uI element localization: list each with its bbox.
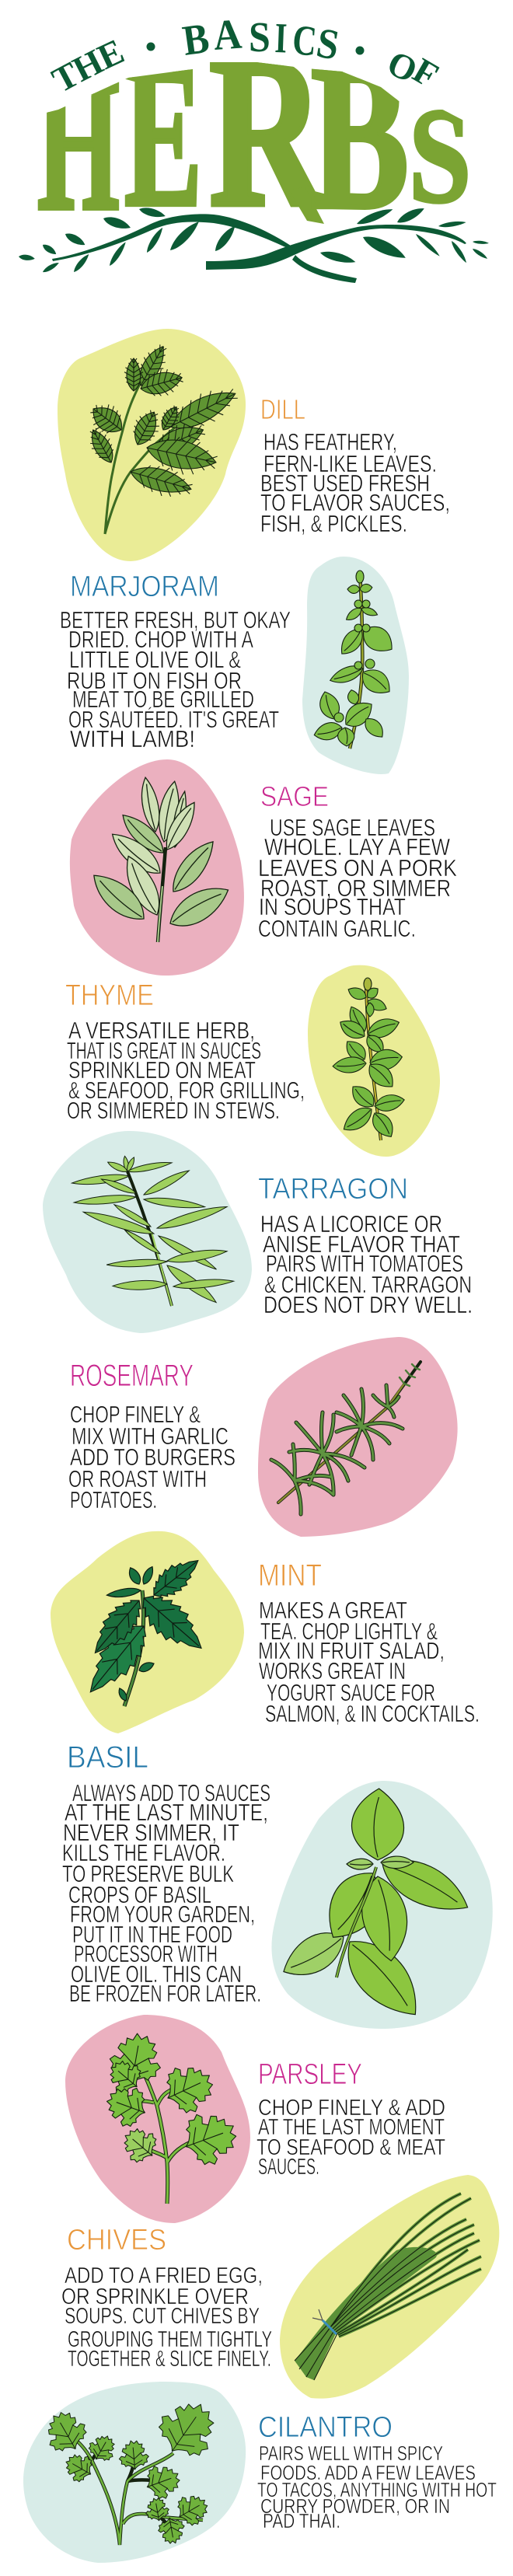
title line: the basics of: B (180, 15, 212, 65)
blob: tarragon background (43, 1131, 252, 1333)
description: basil: BE FROZEN FOR LATER. (69, 1980, 261, 2007)
panel: cilantro (23, 2382, 497, 2563)
panel: chives (61, 2175, 499, 2399)
blob: chives background (280, 2175, 499, 2399)
description: basil (62, 1779, 270, 2007)
description: chives: ADD TO A FRIED EGG, (65, 2264, 263, 2288)
title word: herbs (37, 62, 468, 224)
heading: mint: MINT (258, 1559, 322, 1593)
heading: basil: BASIL (67, 1740, 148, 1775)
description: dill: FERN-LIKE LEAVES. (263, 450, 437, 477)
description: rosemary: ADD TO BURGERS (70, 1443, 236, 1471)
description: basil: NEVER SIMMER, IT (63, 1819, 239, 1846)
heading: marjoram: MARJORAM (70, 571, 219, 603)
description: dill: HAS FEATHERY, (263, 428, 397, 456)
panel: basil (62, 1740, 493, 2030)
description: rosemary: POTATOES. (70, 1486, 157, 1513)
blob: rosemary background (258, 1337, 458, 1537)
description: mint (258, 1597, 480, 1727)
title line: the basics of: S (313, 19, 343, 69)
panel: thyme (65, 965, 440, 1157)
description: marjoram: RUB IT ON FISH OR (67, 667, 242, 694)
icon: sage sprig (86, 776, 235, 942)
description: sage: ROAST, OR SIMMER (260, 874, 451, 902)
description: basil: CROPS OF BASIL (68, 1881, 211, 1908)
description: basil: OLIVE OIL. THIS CAN (71, 1960, 242, 1988)
description: mint: MAKES A GREAT (259, 1597, 407, 1624)
description: marjoram: LITTLE OLIVE OIL & (69, 646, 241, 673)
description: cilantro: PAIRS WELL WITH SPICY (259, 2442, 443, 2465)
description: marjoram: OR SAUTÉED. IT'S GREAT (68, 706, 279, 733)
description: chives: TOGETHER & SLICE FINELY. (68, 2347, 271, 2372)
title line: the basics of: E (92, 31, 130, 77)
description: marjoram: BETTER FRESH, BUT OKAY (60, 606, 291, 634)
title word: herbs: E (124, 21, 202, 250)
description: thyme: THAT IS GREAT IN SAUCES (67, 1037, 261, 1064)
blob: mint background (51, 1531, 244, 1733)
icon: rosemary sprig (271, 1362, 421, 1514)
title line: the basics of: T (46, 54, 86, 100)
title line: the basics of: A (212, 10, 243, 60)
icon: thyme sprig (332, 978, 406, 1141)
description: cilantro (257, 2442, 497, 2532)
heading: cilantro: CILANTRO (258, 2411, 393, 2444)
description: rosemary: CHOP FINELY & (70, 1401, 201, 1428)
title word: herbs: R (209, 11, 326, 253)
description: mint: TEA. CHOP LIGHTLY & (260, 1618, 438, 1645)
title line: the basics of: F (407, 50, 445, 96)
icon: dill sprig (84, 341, 243, 534)
description: dill (260, 428, 450, 537)
icon: basil sprig (275, 1788, 476, 2030)
title word: herbs: B (311, 20, 409, 253)
heading: chives: CHIVES (67, 2224, 166, 2257)
description: sage: USE SAGE LEAVES (270, 814, 435, 841)
icon: chives bundle (295, 2194, 481, 2380)
panel: parsley (65, 2015, 445, 2223)
description: basil: KILLS THE FLAVOR. (62, 1839, 225, 1866)
description: sage: CONTAIN GARLIC. (258, 915, 416, 942)
description: marjoram (60, 606, 291, 752)
blob: parsley background (65, 2015, 250, 2223)
panel: tarragon (43, 1131, 473, 1333)
description: parsley: TO SEAFOOD & MEAT (256, 2135, 445, 2160)
description: thyme: & SEAFOOD, FOR GRILLING, (68, 1077, 305, 1104)
description: parsley (256, 2096, 445, 2180)
blob: sage background (70, 759, 244, 976)
title line: the basics of (46, 10, 445, 100)
title line: the basics of: I (274, 15, 288, 62)
description: rosemary: MIX WITH GARLIC (72, 1422, 229, 1450)
title (19, 10, 489, 283)
description: mint: YOGURT SAUCE FOR (267, 1679, 435, 1706)
description: mint: MIX IN FRUIT SALAD, (258, 1637, 445, 1664)
title word: herbs: H (37, 38, 120, 250)
description: marjoram: MEAT TO BE GRILLED (72, 686, 254, 713)
icon: mint sprig (76, 1550, 213, 1706)
description: basil: AT THE LAST MINUTE, (65, 1799, 268, 1826)
icon: tarragon sprig (72, 1156, 234, 1307)
heading: rosemary: ROSEMARY (70, 1359, 194, 1393)
description: chives (61, 2264, 272, 2372)
blob: marjoram background (302, 557, 409, 774)
description: mint: WORKS GREAT IN (259, 1657, 406, 1684)
description: parsley: AT THE LAST MOMENT (258, 2115, 445, 2140)
description: chives: OR SPRINKLE OVER (61, 2285, 249, 2309)
description: thyme: A VERSATILE HERB, (68, 1017, 255, 1044)
description: parsley: SAUCES. (258, 2155, 319, 2180)
blob: thyme background (308, 965, 440, 1157)
description: chives: SOUPS. CUT CHIVES BY (65, 2304, 260, 2329)
panel: dill (58, 329, 450, 561)
description: parsley: CHOP FINELY & ADD (258, 2096, 445, 2120)
title line: the basics of: O (382, 43, 424, 90)
description: rosemary: OR ROAST WITH (68, 1465, 207, 1492)
blob: dill background (58, 329, 246, 561)
blob: cilantro background (23, 2382, 246, 2563)
title line: the basics of: H (66, 41, 110, 89)
description: rosemary (68, 1401, 236, 1513)
panel: marjoram (60, 557, 409, 774)
description: dill: BEST USED FRESH (260, 469, 430, 497)
description: dill: TO FLAVOR SAUCES, (260, 489, 450, 516)
icon: parsley sprig (101, 2030, 243, 2204)
icon: marjoram sprig (312, 571, 399, 749)
description: chives: GROUPING THEM TIGHTLY (68, 2327, 272, 2352)
description: sage: IN SOUPS THAT (259, 893, 406, 920)
description: basil: ALWAYS ADD TO SAUCES (72, 1779, 270, 1806)
heading: dill: DILL (260, 393, 305, 425)
description: cilantro: PAD THAI. (263, 2509, 340, 2532)
decorative leafy branches (19, 204, 489, 283)
panel: sage (70, 759, 457, 976)
description: basil: TO PRESERVE BULK (62, 1860, 234, 1887)
description: dill: FISH, & PICKLES. (260, 510, 407, 537)
description: sage (258, 814, 457, 942)
description: sage: LEAVES ON A PORK (258, 854, 457, 881)
icon: cilantro sprig (38, 2390, 226, 2546)
description: thyme: SPRINKLED ON MEAT (68, 1056, 256, 1084)
heading: parsley: PARSLEY (258, 2058, 362, 2091)
heading: tarragon: TARRAGON (258, 1173, 408, 1206)
description: basil: FROM YOUR GARDEN, (70, 1901, 255, 1928)
blob: basil background (271, 1781, 493, 2029)
heading: sage: SAGE (260, 780, 329, 812)
description: tarragon (260, 1210, 473, 1318)
description: thyme: OR SIMMERED IN STEWS. (67, 1097, 280, 1124)
description: tarragon: ANISE FLAVOR THAT (263, 1230, 460, 1258)
panel: mint (51, 1531, 480, 1733)
description: sage: WHOLE. LAY A FEW (264, 833, 451, 860)
panel: rosemary (68, 1337, 458, 1537)
heading: thyme: THYME (65, 979, 154, 1012)
title line: the basics of: S (249, 14, 270, 61)
description: basil: PROCESSOR WITH (74, 1940, 218, 1967)
description: marjoram: DRIED. CHOP WITH A (68, 626, 253, 653)
description: basil: PUT IT IN THE FOOD (72, 1921, 232, 1948)
title word: herbs: S (409, 80, 471, 231)
description: thyme (67, 1017, 305, 1124)
description: cilantro: CURRY POWDER, OR IN (260, 2494, 450, 2518)
title line: the basics of: C (291, 16, 319, 65)
description: tarragon: HAS A LICORICE OR (260, 1210, 442, 1237)
description: marjoram: WITH LAMB! (70, 725, 195, 752)
